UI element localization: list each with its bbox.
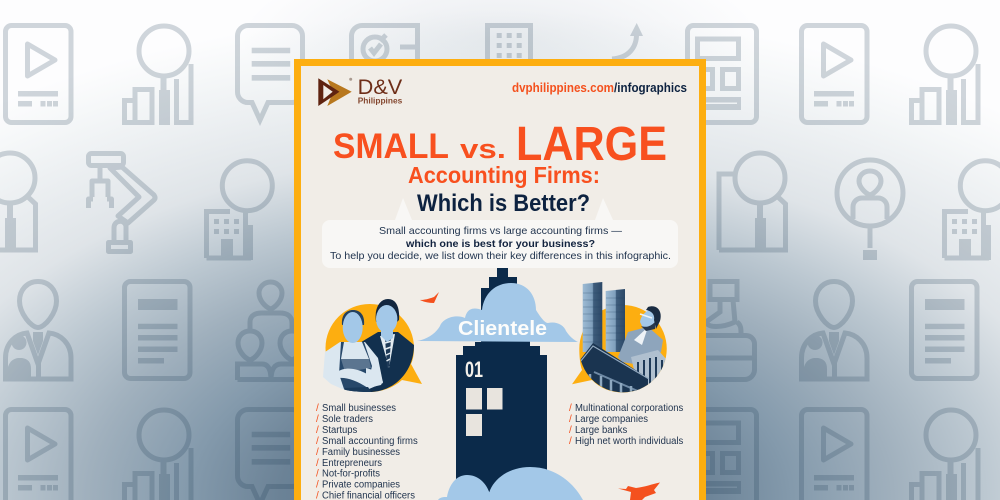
- icon: magnifier over building: [206, 161, 272, 260]
- list: small firm clientele: /: [316, 403, 319, 414]
- icon: speech bubble: [238, 26, 302, 120]
- bank building: [580, 343, 649, 395]
- title: Which is Better?: [417, 190, 590, 217]
- chef: [323, 310, 383, 393]
- logo: D&V Philippines: [318, 75, 403, 106]
- list: small firm clientele: Private companies: [322, 480, 400, 490]
- portrait: small business people: [323, 299, 422, 395]
- list: small firm clientele: /: [316, 480, 319, 490]
- businessman: [355, 299, 414, 395]
- icon: report document right: [912, 282, 977, 378]
- intro speech bubble: To help you decide, we list down their key differences in this infographic.: [330, 251, 671, 262]
- list: small firm clientele: Sole traders: [322, 414, 373, 425]
- speech circle: [326, 304, 422, 392]
- icon: speech bubble bottom: [238, 410, 302, 500]
- icon: report document: [124, 282, 190, 378]
- businessman with glasses: [618, 306, 663, 365]
- title: [333, 118, 667, 217]
- icon: logo arrows: [318, 78, 352, 106]
- icon: checklist: [352, 26, 418, 70]
- intro speech bubble: Small accounting firms vs large accounting firms —: [379, 226, 623, 237]
- skyscrapers: [583, 282, 625, 352]
- icon: play document bottom left: [6, 410, 71, 500]
- cloud: bottom of tower: [438, 467, 583, 500]
- poster frame: [298, 62, 702, 500]
- section number: 01: [465, 357, 483, 382]
- icon: executive right: [802, 282, 867, 380]
- portrait: large corporations: [572, 282, 667, 395]
- office block behind bank: [631, 350, 666, 390]
- list: small firm clientele: /: [316, 436, 319, 447]
- infographic poster card: [298, 62, 702, 500]
- list: small firm clientele: /: [316, 458, 319, 469]
- cloud: clientele heading: [417, 283, 578, 342]
- bird: small: [420, 292, 439, 303]
- icon: magnifier document left: [0, 153, 36, 252]
- icon: magnifier over building right: [944, 161, 1000, 260]
- icon: magnifier bar chart bottom left: [124, 410, 191, 500]
- list: large firm clientele: Large companies: [575, 414, 648, 425]
- icon: magnifier over bar chart: [124, 26, 191, 125]
- list: small firm clientele: Small businesses: [322, 403, 396, 414]
- building windows: [466, 388, 502, 436]
- list: large firm clientele: Multinational corporations: [575, 403, 683, 414]
- icon: play document: [6, 26, 71, 122]
- list: large firm clientele: /: [569, 425, 572, 436]
- icon: magnifier over bar chart right: [912, 26, 978, 125]
- logo: D&V Philippines: D&V: [358, 75, 403, 99]
- website link: dvphilippines.com/infographics: [512, 81, 687, 95]
- intro speech bubble: [322, 198, 678, 268]
- bird: large: [618, 482, 660, 500]
- title: SMALL: [333, 127, 449, 166]
- list: large firm clientele: /: [569, 414, 572, 425]
- cloud: clientele heading: Clientele: [458, 318, 547, 340]
- icon: office building: [488, 26, 530, 76]
- list: small firm clientele: /: [316, 447, 319, 458]
- list: small firm clientele: /: [316, 468, 319, 480]
- logo: D&V Philippines: Philippines: [358, 95, 403, 105]
- icon: team: [238, 282, 310, 380]
- icon: magnifier bar chart bottom right: [912, 410, 978, 500]
- intro speech bubble: which one is best for your business?: [405, 239, 595, 250]
- icon: layout form bottom: [688, 410, 756, 500]
- icon: magnifier document right: [719, 153, 786, 252]
- tower building: [456, 268, 547, 500]
- icon: stamp: [690, 282, 754, 380]
- title: Accounting Firms:: [408, 162, 600, 188]
- list: large firm clientele: /: [569, 436, 572, 447]
- icon: person in magnifier: [837, 160, 903, 255]
- icon: play document bottom right: [802, 410, 867, 500]
- icon: robot arm: [88, 154, 155, 252]
- list: small firm clientele: /: [316, 414, 319, 425]
- icon: executive left: [6, 282, 71, 380]
- list: large firm clientele: Large banks: [575, 425, 627, 436]
- list: large firm clientele: [569, 403, 683, 447]
- list: small firm clientele: Not-for-profits: [322, 468, 380, 480]
- list: small firm clientele: [316, 403, 418, 500]
- speech circle: [572, 305, 667, 392]
- title: LARGE: [516, 118, 667, 171]
- title: vs.: [460, 134, 506, 164]
- list: small firm clientele: Entrepreneurs: [322, 458, 382, 469]
- list: small firm clientele: Family businesses: [322, 447, 400, 458]
- list: small firm clientele: Startups: [322, 425, 357, 436]
- icon: growth arrow: [612, 23, 643, 59]
- icon: play document right: [802, 26, 867, 122]
- list: small firm clientele: /: [316, 425, 319, 436]
- icon: layout form: [688, 26, 756, 122]
- list: large firm clientele: /: [569, 403, 572, 414]
- list: large firm clientele: High net worth individuals: [575, 436, 683, 447]
- list: small firm clientele: Small accounting firms: [322, 436, 418, 447]
